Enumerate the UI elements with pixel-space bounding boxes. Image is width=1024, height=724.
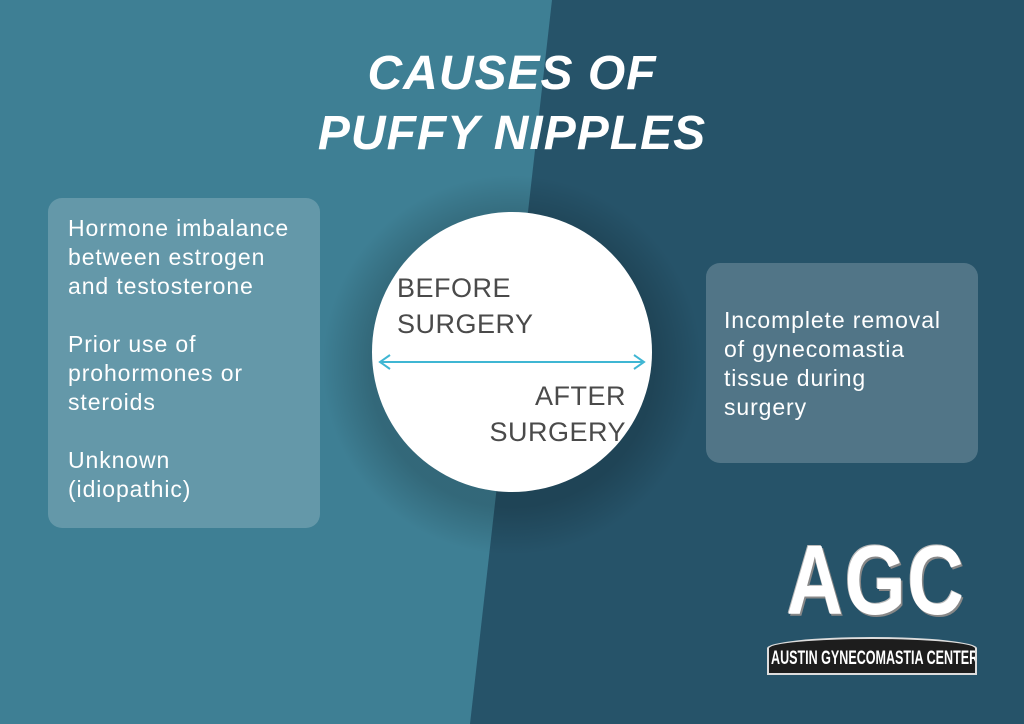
logo: AGC [786, 525, 966, 635]
panel: causes: Hormone imbalance [68, 215, 289, 241]
panel: after surgery cause: Incomplete removal [724, 307, 941, 333]
panel: after surgery cause: surgery [724, 394, 807, 420]
panel: causes [48, 198, 320, 528]
after surgery label: AFTER [535, 381, 626, 411]
panel: causes: and testosterone [68, 273, 254, 299]
logo [767, 525, 977, 675]
after surgery label [489, 381, 626, 447]
title: CAUSES OF [367, 47, 657, 100]
panel: after surgery cause: of gynecomastia [724, 336, 905, 362]
title: PUFFY NIPPLES [318, 107, 706, 160]
before surgery label [397, 273, 534, 339]
panel: causes: (idiopathic) [68, 476, 191, 502]
logo: AUSTIN GYNECOMASTIA CENTER [771, 648, 977, 669]
panel: causes: Unknown [68, 447, 170, 473]
arrow: double [378, 354, 646, 370]
before surgery label: BEFORE [397, 273, 511, 303]
panel: causes: prohormones or [68, 360, 243, 386]
panel: after surgery cause [706, 263, 978, 463]
circle [372, 212, 652, 492]
panel: after surgery cause: tissue during [724, 365, 866, 391]
title [318, 47, 706, 160]
panel: causes: Prior use of [68, 331, 196, 357]
panel: causes: steroids [68, 389, 156, 415]
after surgery label: SURGERY [489, 417, 626, 447]
before surgery label: SURGERY [397, 309, 534, 339]
panel: causes: between estrogen [68, 244, 265, 270]
